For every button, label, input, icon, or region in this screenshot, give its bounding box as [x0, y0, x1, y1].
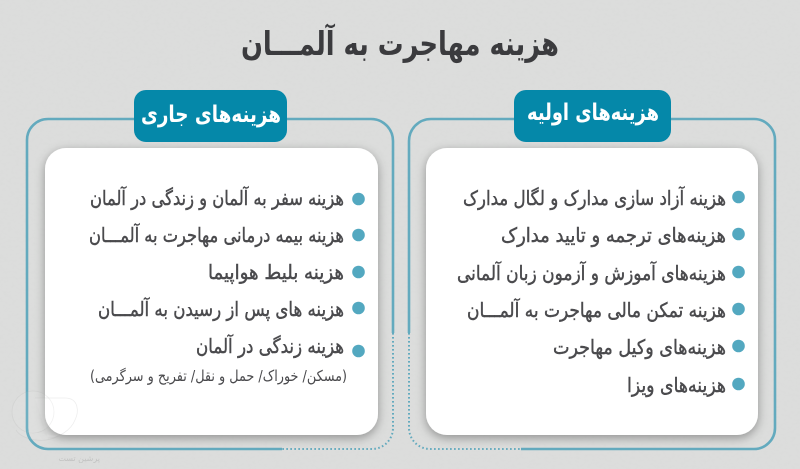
- watermark logo: پرشین تست: [58, 454, 100, 463]
- item 2: هزینه بیمه درمانی مهاجرت به آلمـــان: [89, 222, 344, 247]
- panel: initial costs: [409, 90, 775, 449]
- panel: current costs: [27, 90, 393, 449]
- item 5 note: (مسکن/ خوراک/ حمل و نقل/ تفریح و سرگرمی): [90, 367, 347, 385]
- item 1: هزینه آزاد سازی مدارک و لگال مدارک: [463, 185, 726, 210]
- heading badge: initial costs: [514, 90, 671, 142]
- frame: initial costs: [409, 119, 775, 449]
- watermark logo: [12, 391, 100, 463]
- list: initial costs: [457, 185, 745, 397]
- heading badge: current costs: هزینه‌های جاری: [141, 102, 281, 128]
- item 3: هزینه‌های آموزش و آزمون زبان آلمانی: [457, 260, 726, 285]
- card: current costs: [45, 148, 378, 435]
- item 4: هزینه تمکن مالی مهاجرت به آلمـــان: [467, 297, 726, 322]
- title: هزینه مهاجرت به آلمـــان: [241, 23, 559, 64]
- heading badge: current costs: [134, 90, 287, 142]
- item 3: هزینه بلیط هواپیما: [208, 260, 344, 285]
- item 5: هزینه‌های وکیل مهاجرت: [553, 335, 726, 359]
- card: initial costs: [426, 148, 758, 435]
- frame: current costs: [27, 119, 393, 449]
- item 5: هزینه زندگی در آلمان: [196, 333, 344, 358]
- heading badge: initial costs: هزینه‌های اولیه: [527, 100, 659, 126]
- item 2: هزینه‌های ترجمه و تایید مدارک: [501, 223, 726, 247]
- list: current costs: [89, 185, 365, 385]
- item 4: هزینه های پس از رسیدن به آلمـــان: [98, 296, 344, 322]
- item 1: هزینه سفر به آلمان و زندگی در آلمان: [90, 185, 344, 210]
- item 6: هزینه‌های ویزا: [627, 373, 726, 397]
